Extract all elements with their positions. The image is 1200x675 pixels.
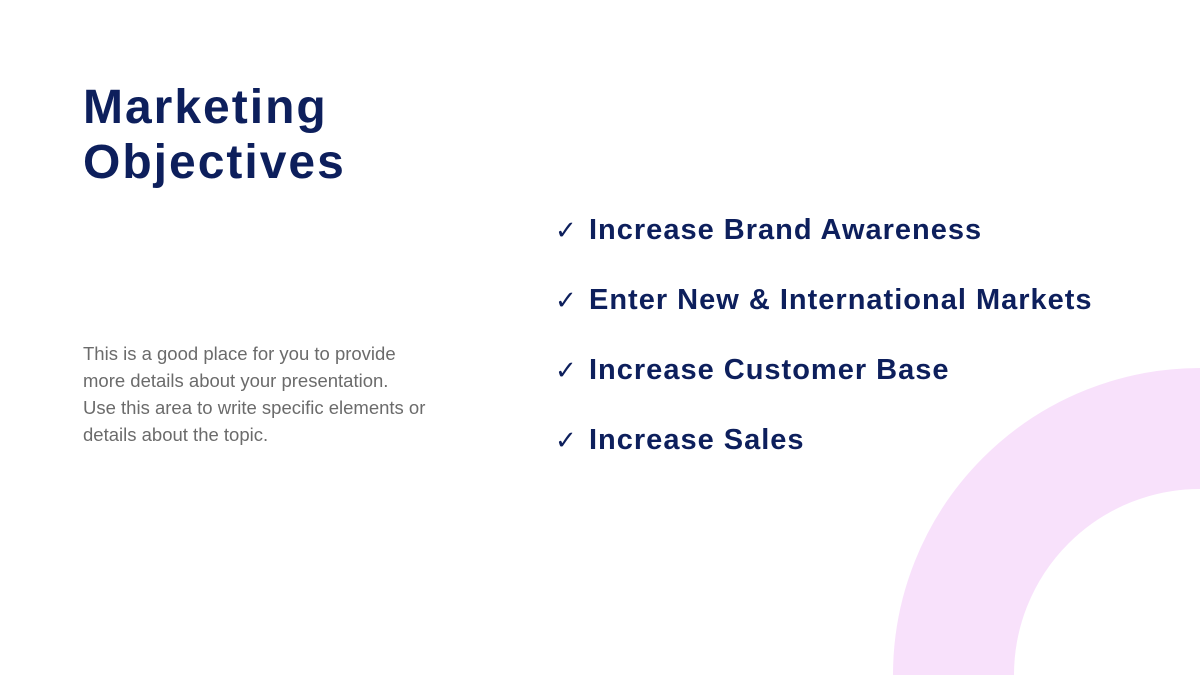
- body text: Use this area to write specific elements or: [83, 397, 425, 418]
- item 3: Increase Customer Base: [589, 354, 950, 386]
- title: [83, 81, 346, 189]
- item 4: ✓: [555, 426, 577, 456]
- item 4: Increase Sales: [589, 424, 805, 456]
- item 2: Enter New & International Markets: [589, 284, 1093, 316]
- body text: This is a good place for you to provide: [83, 343, 396, 364]
- checklist: [555, 214, 1093, 456]
- item 3: ✓: [555, 356, 577, 386]
- title: Marketing: [83, 81, 328, 134]
- item 1: ✓: [555, 216, 577, 246]
- item 2: ✓: [555, 286, 577, 316]
- title: Objectives: [83, 136, 346, 189]
- item 1: Increase Brand Awareness: [589, 214, 982, 246]
- body text: details about the topic.: [83, 424, 268, 445]
- body text: [83, 343, 426, 445]
- body text: more details about your presentation.: [83, 370, 388, 391]
